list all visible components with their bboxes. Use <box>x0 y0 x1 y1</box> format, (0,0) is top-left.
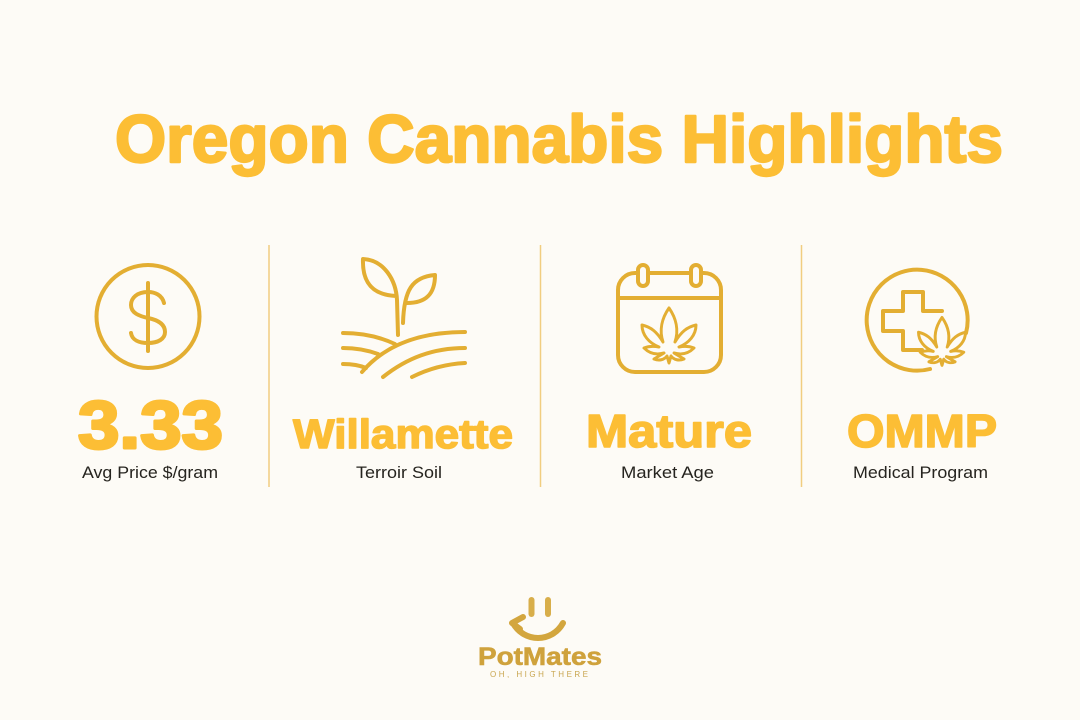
icon: smiley <box>512 600 563 638</box>
label: terroir soil: Terroir Soil <box>356 464 442 482</box>
panel: terroir soil <box>293 259 513 482</box>
stat: Mature: Mature <box>586 405 752 457</box>
panel: medical program <box>847 270 997 482</box>
panel: average price <box>78 265 223 482</box>
logo: PotMates <box>478 600 602 679</box>
wordmark: PotMates <box>478 643 602 671</box>
stat: 3.33: 3.33 <box>78 387 223 463</box>
icon: dollar coin <box>96 265 200 368</box>
label: medical program: Medical Program <box>853 464 988 482</box>
icon: calendar with leaf <box>618 265 721 372</box>
stat: Willamette: Willamette <box>293 411 513 457</box>
icon: medical cross with leaf <box>867 270 968 371</box>
tagline: OH, HIGH THERE <box>490 670 588 679</box>
panel: market age <box>586 265 752 482</box>
label: market age: Market Age <box>621 464 714 482</box>
icon: sprout and field <box>343 259 465 377</box>
stat: OMMP: OMMP <box>847 405 997 457</box>
label: avg price: Avg Price $/gram <box>82 464 218 482</box>
title: Oregon Cannabis Highlights <box>115 102 1003 177</box>
